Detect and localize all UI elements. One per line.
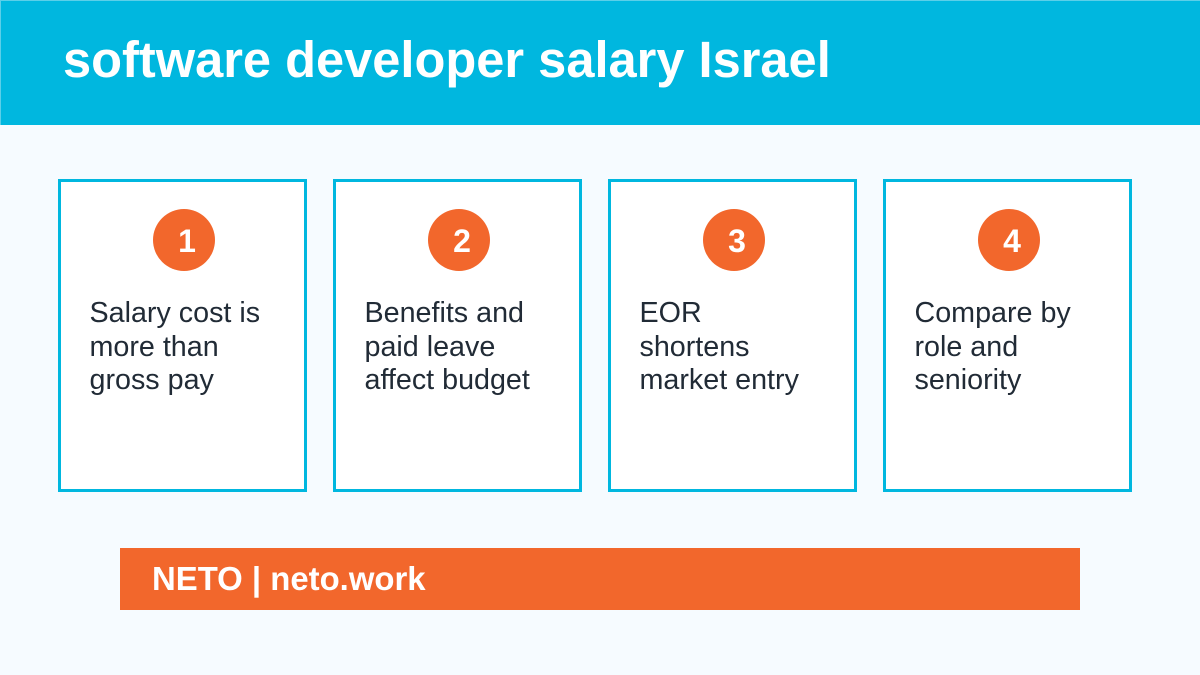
icon: number 2: 2: [453, 222, 471, 258]
icon: number 4: 4: [1003, 222, 1021, 258]
text: card 1: gross pay: [90, 364, 214, 396]
text: card 3: [640, 297, 799, 396]
text: card 1: more than: [90, 330, 219, 362]
text: card 1: [90, 297, 260, 396]
text: card 3: EOR: [640, 297, 702, 329]
text: card 3: market entry: [640, 364, 799, 396]
icon: number 2: [428, 208, 490, 270]
panel: card 2: [333, 179, 582, 492]
text: card 2: affect budget: [364, 364, 530, 396]
text: card 4: role and: [914, 330, 1018, 362]
panel: card 4: [883, 179, 1132, 492]
text: card 1: Salary cost is: [90, 297, 260, 329]
text: card 4: Compare by: [914, 297, 1071, 329]
title: software developer salary Israel: [63, 31, 831, 88]
icon: number 3: 3: [728, 222, 746, 258]
icon: number 4: [978, 208, 1040, 270]
text: card 2: paid leave: [364, 330, 495, 362]
footer text: NETO | neto.work: [152, 560, 426, 597]
panel: card 3: [608, 179, 857, 492]
icon: number 3: [703, 208, 765, 270]
footer bar: [120, 548, 1080, 610]
text: card 4: [914, 297, 1071, 396]
text: card 2: [364, 297, 530, 396]
text: card 3: shortens: [640, 330, 750, 362]
text: card 2: Benefits and: [364, 297, 524, 329]
icon: number 1: 1: [178, 222, 196, 258]
header band: [0, 0, 1200, 125]
panel: card 1: [58, 179, 307, 492]
text: card 4: seniority: [914, 364, 1021, 396]
icon: number 1: [153, 208, 215, 270]
